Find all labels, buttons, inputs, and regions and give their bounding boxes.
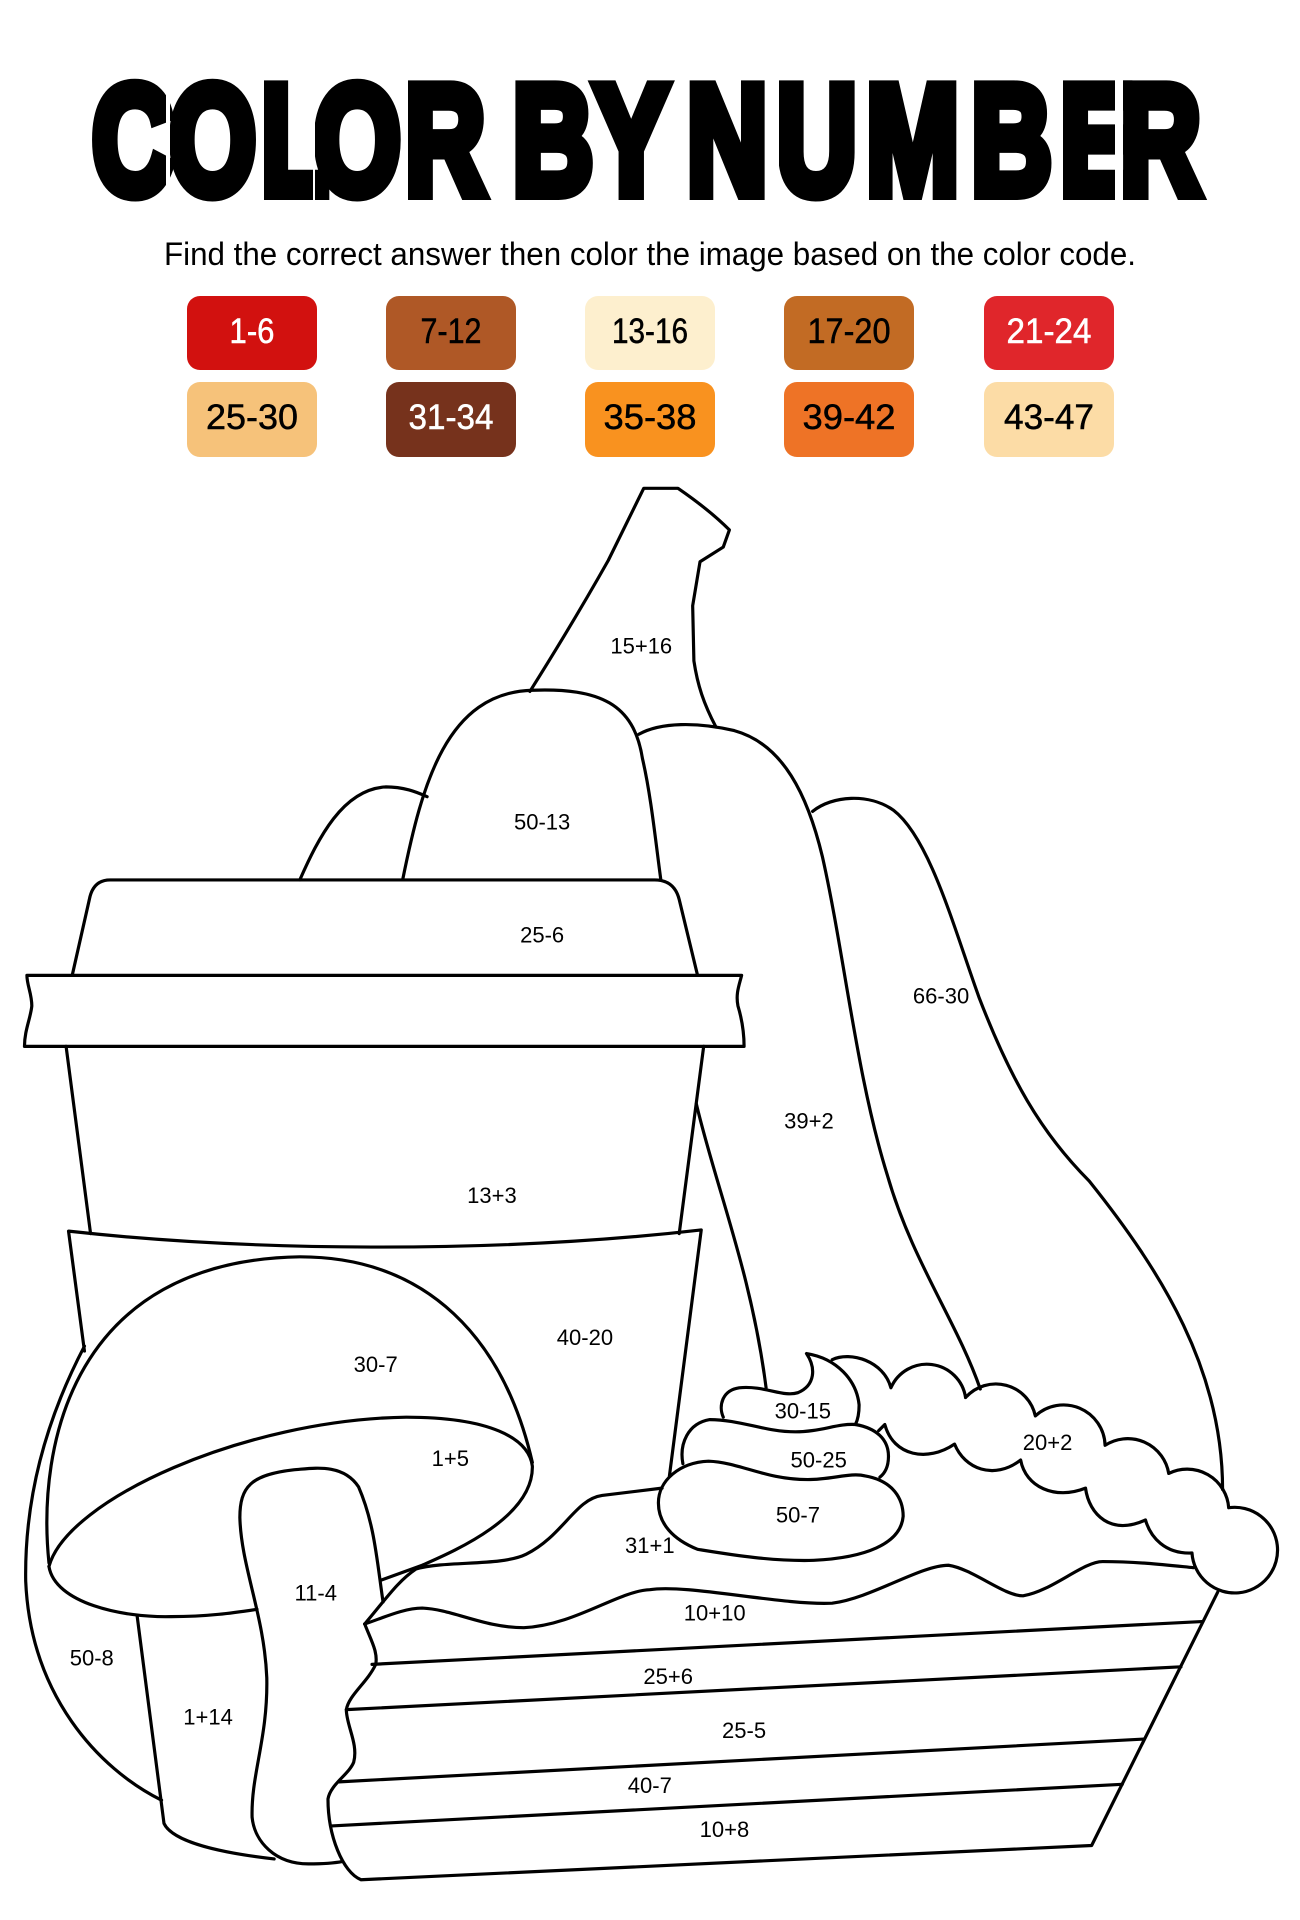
- cake slice: [328, 1488, 1218, 1880]
- math problem labels: [70, 634, 1072, 1842]
- math problem labels: 15+16: [610, 634, 672, 659]
- math problem labels: 50-13: [514, 810, 570, 835]
- math problem labels: 20+2: [1023, 1430, 1072, 1455]
- legend swatch 21-24: [984, 296, 1114, 370]
- legend swatch 13-16: [585, 296, 715, 370]
- math problem labels: 25-5: [722, 1718, 766, 1743]
- legend swatch 1-6: 1-6: [230, 312, 274, 351]
- coffee cup: [24, 880, 744, 1859]
- legend swatch 17-20: [784, 296, 914, 370]
- legend swatch 25-30: [187, 382, 317, 457]
- instructions: Find the correct answer then color the image based on the color code.: [164, 236, 1136, 272]
- math problem labels: 50-25: [791, 1447, 847, 1472]
- legend swatch 21-24: 21-24: [1006, 312, 1092, 351]
- math problem labels: 10+8: [700, 1817, 749, 1842]
- math problem labels: 10+10: [684, 1600, 746, 1625]
- math problem labels: 1+14: [183, 1704, 233, 1729]
- color legend: [187, 296, 1114, 457]
- legend swatch 35-38: [585, 382, 715, 457]
- banana bunch: [300, 488, 1223, 1489]
- math problem labels: 11-4: [295, 1581, 337, 1606]
- title: NUMBER: [687, 53, 1201, 227]
- math problem labels: 39+2: [784, 1108, 834, 1133]
- whipped topping: [658, 1354, 903, 1560]
- math problem labels: 40-20: [557, 1325, 613, 1350]
- title: [92, 53, 1201, 227]
- legend swatch 39-42: [784, 382, 914, 457]
- legend swatch 35-38: 35-38: [604, 398, 696, 437]
- legend swatch 13-16: 13-16: [612, 312, 688, 351]
- math problem labels: 50-8: [70, 1646, 114, 1671]
- legend swatch 39-42: 39-42: [802, 398, 896, 437]
- legend swatch 43-47: [984, 382, 1114, 457]
- legend swatch 25-30: 25-30: [206, 398, 298, 437]
- legend swatch 31-34: [386, 382, 516, 457]
- coloring artwork: [24, 488, 1278, 1880]
- title: BY: [513, 53, 668, 227]
- legend swatch 17-20: 17-20: [808, 312, 890, 351]
- math problem labels: 30-15: [775, 1398, 831, 1423]
- math problem labels: 50-7: [776, 1502, 820, 1527]
- math problem labels: 40-7: [628, 1773, 672, 1798]
- legend swatch 7-12: [386, 296, 516, 370]
- math problem labels: 30-7: [354, 1352, 398, 1377]
- cream swirl on the cake: [832, 1357, 1278, 1593]
- legend swatch 7-12: 7-12: [420, 312, 482, 351]
- math problem labels: 66-30: [913, 984, 969, 1009]
- math problem labels: 25+6: [643, 1664, 693, 1689]
- legend swatch 1-6: [187, 296, 317, 370]
- math problem labels: 25-6: [520, 922, 564, 947]
- math problem labels: 13+3: [467, 1183, 517, 1208]
- legend swatch 31-34: 31-34: [408, 398, 494, 437]
- math problem labels: 1+5: [432, 1446, 469, 1471]
- legend swatch 43-47: 43-47: [1004, 398, 1094, 437]
- mushroom: [26, 1257, 532, 1864]
- math problem labels: 31+1: [625, 1533, 675, 1558]
- title: COLOR: [92, 53, 485, 227]
